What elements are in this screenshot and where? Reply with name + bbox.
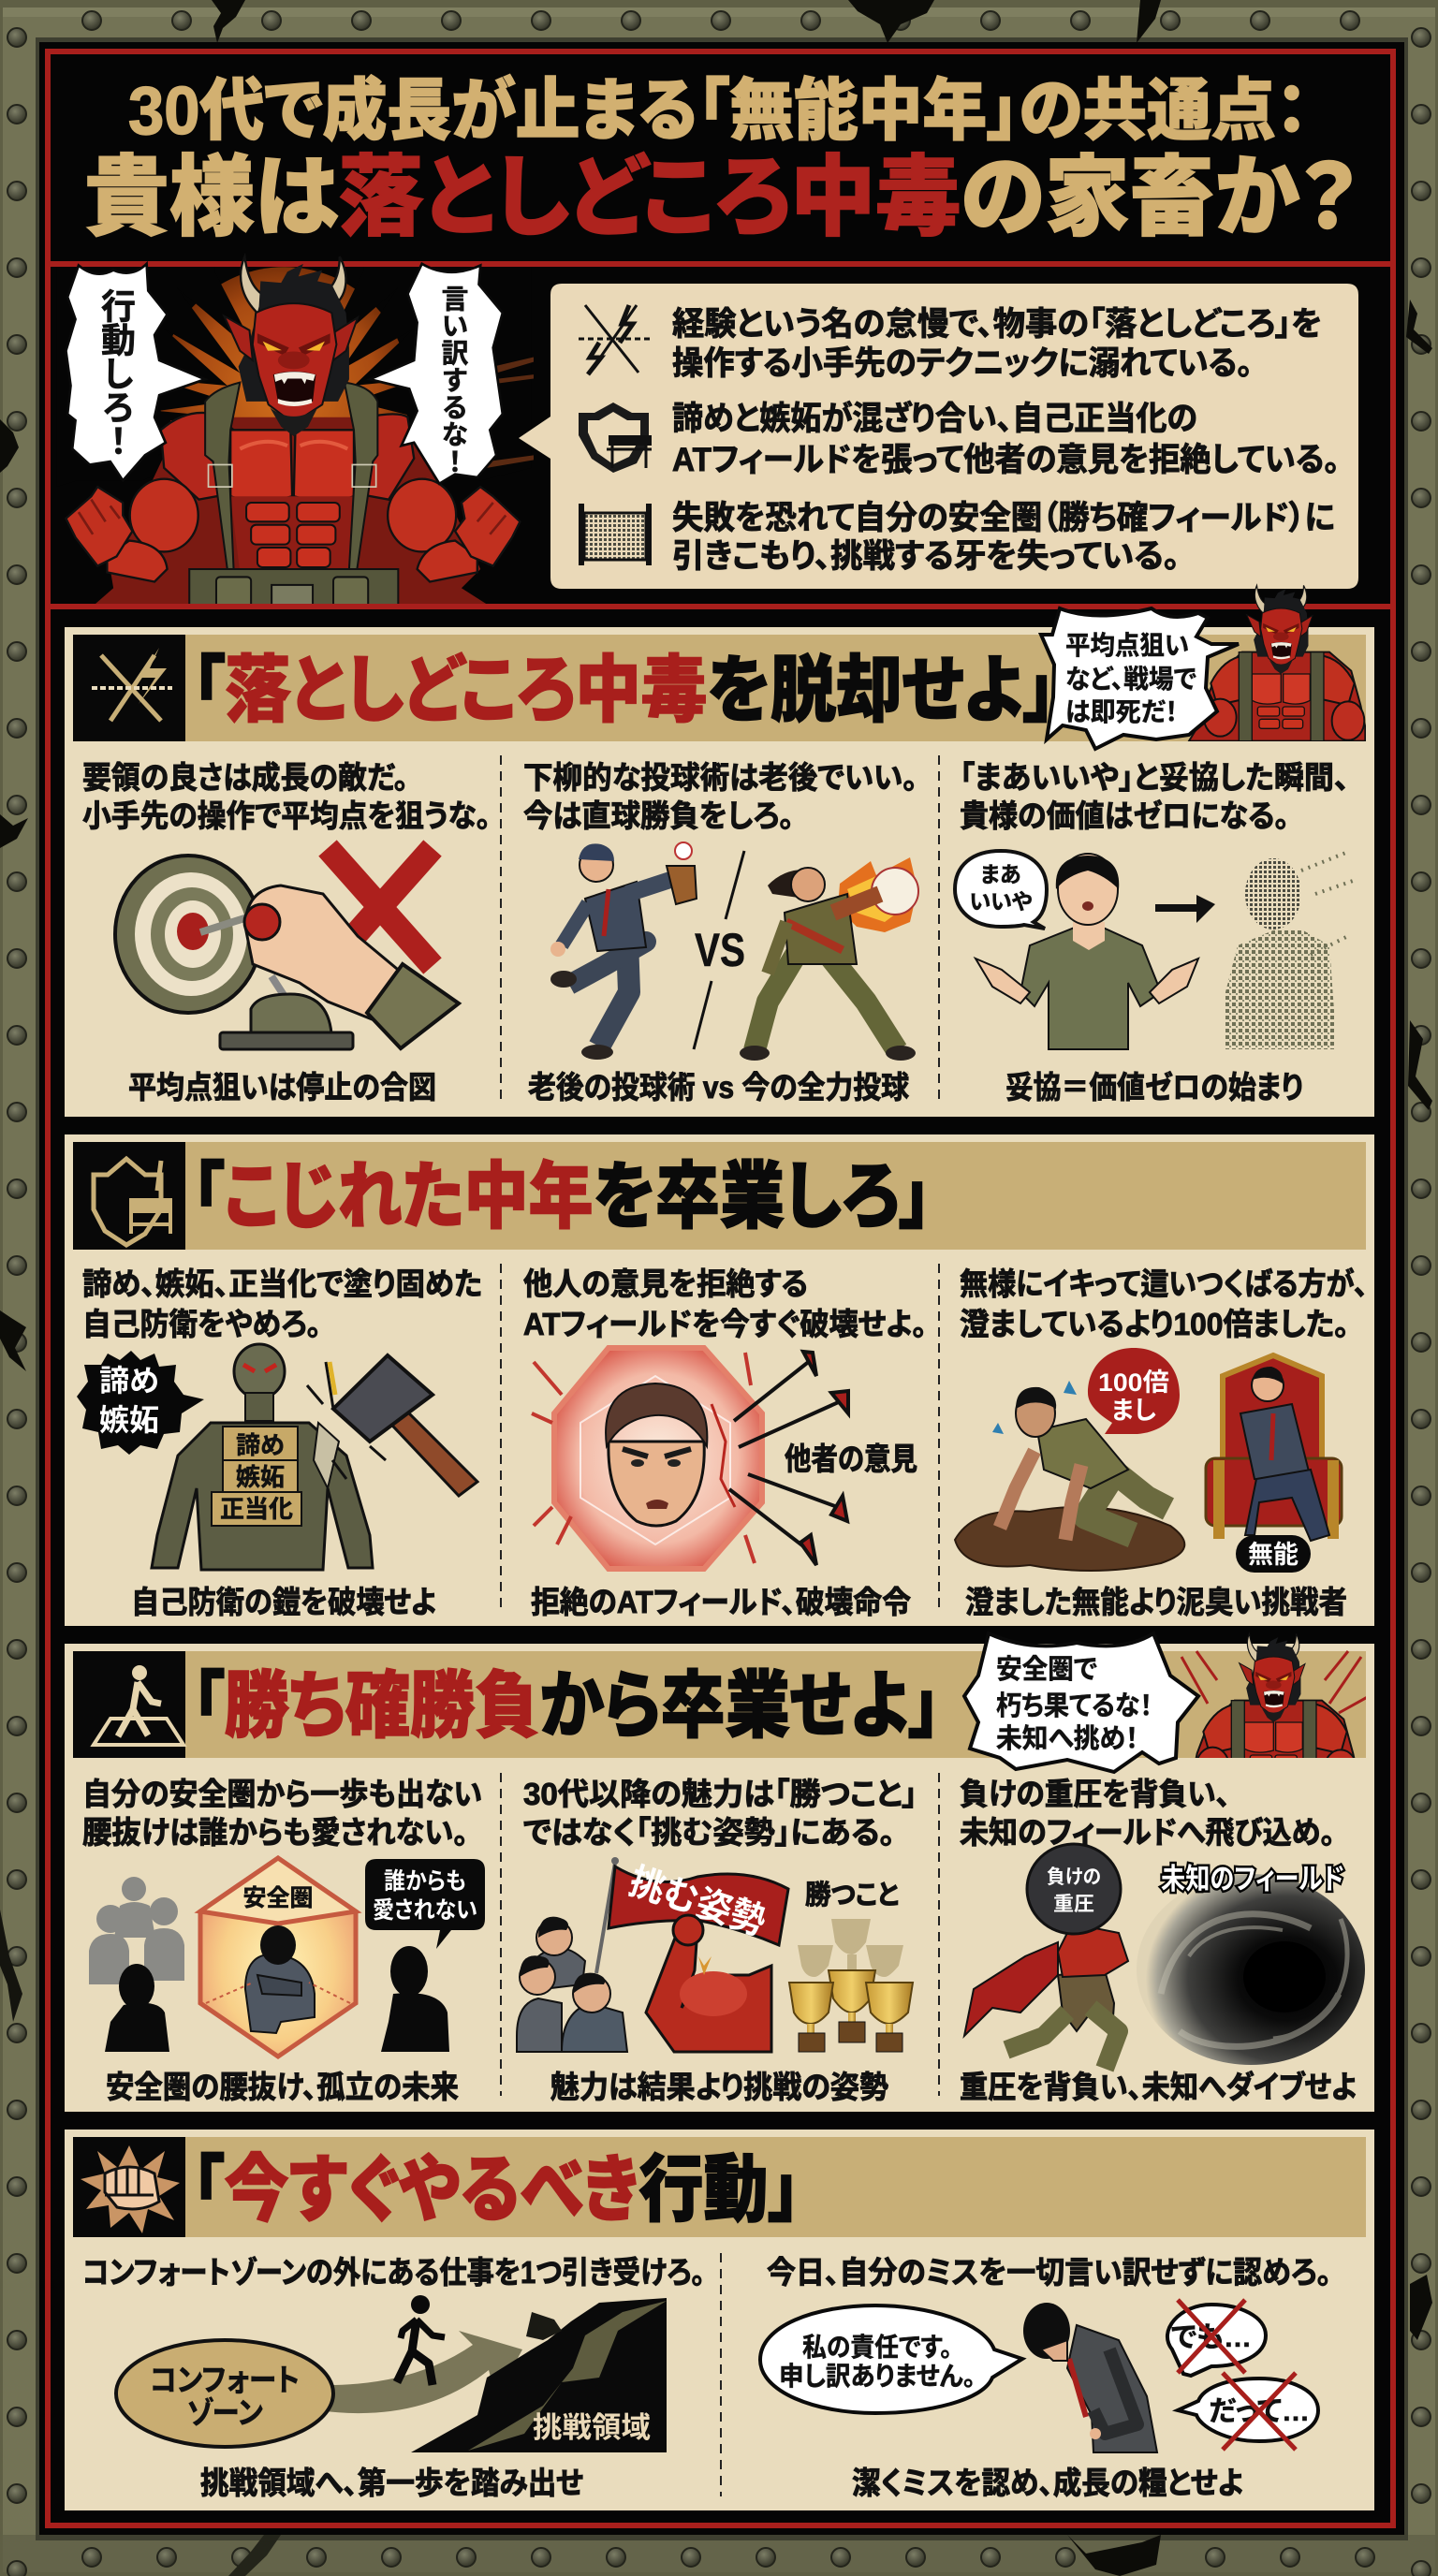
hero: red oni with speech bubbles [56, 253, 534, 612]
burst label: 諦め嫉妬: 嫉妬 [99, 1403, 159, 1437]
arrows: others' opinions [729, 1352, 848, 1565]
panel: section 2 [65, 1134, 1374, 1626]
illustration: arrow from comfort zone [318, 2331, 522, 2413]
icon: walking figure [397, 2295, 445, 2385]
illustration: AT field with face [532, 1348, 762, 1569]
speech bubble [1041, 608, 1239, 749]
illustration: watching people [517, 1917, 627, 2052]
illustration: man on throne [1206, 1355, 1342, 1541]
illustration: crawling man in mud [955, 1381, 1184, 1571]
icon: shield with barricade [73, 1142, 185, 1250]
left action text: コンフォートゾーンの外にある仕事を1つ引き受けろ。 [82, 2255, 705, 2290]
speech bubble: まあいいや: まあ [980, 862, 1021, 886]
column 2 text [523, 1777, 917, 1850]
column 3 text: 貴様の価値はゼロになる。 [960, 798, 1289, 833]
column 2 text [523, 1266, 927, 1341]
heading: 「こじれた中年を卒業しろ」 [192, 1155, 932, 1237]
speech bubble left [66, 264, 205, 480]
bubble text: 平均点狙い [1065, 631, 1189, 660]
bubble: 100倍まし: 100倍 [1098, 1368, 1169, 1397]
bubble text: 未知へ挑め！ [996, 1723, 1138, 1754]
heading: 「勝ち確勝負から卒業せよ」 [192, 1664, 941, 1747]
label: 勝つこと: 勝つこと [805, 1880, 899, 1910]
icon: fence [579, 504, 652, 565]
bubble: 100倍まし: まし [1111, 1397, 1156, 1425]
illustration: cliff [411, 2298, 667, 2452]
column 1 text: 自分の安全圏から一歩も出ない [82, 1777, 482, 1811]
text: symptom three: 失敗を恐れて自分の安全圏（勝ち確フィールド）に [672, 500, 1335, 536]
bubble: 誰からも愛されない: 愛されない [373, 1897, 477, 1924]
icon: hammer [307, 1355, 477, 1496]
column 2 text: 他人の意見を拒絶する [523, 1266, 808, 1301]
illustration: black vortex: 未知のフィールド [1161, 1863, 1344, 1895]
illustration: warrior carrying boulder: 負けの [1047, 1866, 1101, 1888]
text: symptom one: 経験という名の怠慢で、物事の「落としどころ」を [672, 306, 1322, 343]
text: symptom two: ATフィールドを張って他者の意見を拒絶している。 [672, 442, 1340, 478]
illustration: armor figure [152, 1344, 373, 1570]
illustration: cliff: 挑戦領域 [533, 2411, 651, 2444]
bubble: でも… [1167, 2300, 1266, 2376]
icon: fist burst [73, 2137, 185, 2237]
illustration: warrior carrying boulder: 重圧 [1053, 1894, 1094, 1915]
column 1 text [82, 1777, 482, 1850]
icon: cracked shield with barricade [579, 402, 652, 473]
speech bubble [964, 1633, 1198, 1772]
dashed dividers [501, 1264, 939, 1611]
illustration: black person left [105, 1964, 169, 2052]
comfort zone ellipse: ゾーン [186, 2395, 263, 2430]
oni mini portrait with red rays [1180, 1632, 1366, 1758]
column 3 text: 澄ましているより100倍ました。 [960, 1307, 1349, 1341]
caption: 自己防衛の鎧を破壊せよ [131, 1585, 436, 1619]
illustration: target, hand on lever, red X [115, 848, 459, 1049]
text: symptom three [672, 500, 1335, 575]
caption: 安全圏の腰抜け、孤立の未来 [106, 2070, 459, 2104]
column 3 text [960, 1777, 1335, 1850]
illustration: safety zone hexagon with crouching man [200, 1858, 356, 2056]
bubble text: など、戦場で [1065, 665, 1196, 694]
column 1 text [82, 1266, 482, 1341]
column 2 text: 30代以降の魅力は「勝つこと」 [523, 1777, 917, 1811]
caption: 潔くミスを認め、成長の糧とせよ [852, 2466, 1243, 2500]
illustration: safety zone hexagon with crouching man: 安全圏 [242, 1885, 314, 1911]
speech bubble: apology: 私の責任です。 [802, 2333, 952, 2362]
label pill: 無能: 無能 [1248, 1541, 1299, 1569]
illustration: black person right [381, 1946, 449, 2052]
illustration: old pitcher in suit [550, 842, 697, 1060]
illustration: warrior carrying boulder [964, 1844, 1128, 2069]
column 2 text: ATフィールドを今すぐ破壊せよ。 [523, 1307, 927, 1341]
dashed divider [720, 2253, 722, 2496]
column 3 text [960, 760, 1349, 833]
bubble: だって… [1178, 2373, 1318, 2450]
illustration: man dissolving [1225, 852, 1356, 1049]
bubble text [1065, 631, 1196, 726]
label: 他者の意見: 他者の意見 [785, 1442, 917, 1476]
column 3 text: 未知のフィールドへ飛び込め。 [960, 1815, 1335, 1850]
icon: crossed lightning box [73, 635, 185, 741]
column 1 text: 腰抜けは誰からも愛されない。 [82, 1815, 468, 1850]
illustration: grey crowd [89, 1877, 184, 1984]
caption: 妥協＝価値ゼロの始まり [1005, 1070, 1303, 1105]
oni mini portrait [1189, 585, 1365, 741]
caption: 老後の投球術 vs 今の全力投球 [528, 1070, 909, 1105]
bubble text [996, 1654, 1152, 1754]
text: symptom one [672, 306, 1322, 382]
dashed dividers [501, 1773, 939, 2096]
title: 貴様は落としどころ中毒の家畜か？ [84, 148, 1358, 246]
burst label: 諦め嫉妬: 諦め [99, 1364, 159, 1398]
speech bubble: apology: 申し訳ありません。 [779, 2362, 976, 2391]
bubble text: は即死だ！ [1065, 697, 1178, 726]
column 2 text: 下柳的な投球術は老後でいい。 [523, 760, 917, 795]
title: 30代で成長が止まる「無能中年」の共通点： [128, 74, 1308, 149]
illustration: young pitcher with fireball [740, 857, 918, 1061]
column 1 text [82, 760, 491, 833]
column 2 text: ではなく「挑む姿勢」にある。 [523, 1815, 895, 1850]
VS label with slashes [694, 851, 745, 1049]
column 1 text: 自己防衛をやめろ。 [82, 1307, 321, 1341]
caption: 挑戦領域へ、第一歩を踏み出せ [200, 2466, 583, 2500]
illustration: armor figure: 正当化 [220, 1495, 293, 1523]
illustration: banner 挑む姿勢 [596, 1857, 788, 1973]
speech bubble: まあいいや: いいや [969, 889, 1033, 914]
text: symptom two: 諦めと嫉妬が混ざり合い、自己正当化の [672, 400, 1197, 437]
caption: 澄ました無能より泥臭い挑戦者 [965, 1585, 1347, 1619]
illustration: black vortex [1137, 1863, 1365, 2065]
VS label with slashes: VS [695, 924, 745, 976]
caption: 平均点狙いは停止の合図 [128, 1070, 436, 1105]
arrow [1155, 895, 1215, 923]
panel: section 1 [65, 585, 1374, 1117]
icon: walking person box [73, 1651, 185, 1758]
column 2 text: 今は直球勝負をしろ。 [523, 798, 794, 833]
bubble text right: 言い訳するな！ [437, 285, 468, 475]
column 3 text: 負けの重圧を背負い、 [960, 1777, 1230, 1811]
column 1 text: 要領の良さは成長の敵だ。 [82, 760, 408, 795]
burst label: 諦め嫉妬 [77, 1351, 204, 1455]
column 1 text: 小手先の操作で平均点を狙うな。 [82, 798, 491, 833]
bubble: 100倍まし [1088, 1348, 1180, 1434]
text: symptom one: 操作する小手先のテクニックに溺れている。 [672, 345, 1253, 382]
bubble text: 安全圏で [996, 1654, 1097, 1685]
text: symptom three: 引きこもり、挑戦する牙を失っている。 [672, 538, 1180, 575]
heading: 「落としどころ中毒を脱却せよ」 [192, 649, 1056, 731]
illustration: banner 挑む姿勢: 挑む姿勢 [624, 1861, 770, 1943]
illustration: armor figure: 諦め [236, 1431, 285, 1459]
illustration: trophies [789, 1919, 913, 2052]
caption: 拒絶のATフィールド、破壊命令 [531, 1585, 911, 1619]
text: symptom two [672, 400, 1340, 478]
comfort zone ellipse [116, 2340, 333, 2447]
label pill: 無能 [1236, 1535, 1311, 1573]
speech bubble right [370, 264, 503, 484]
dashed dividers [501, 755, 939, 1102]
panel: section 3 [65, 1633, 1374, 2112]
caption: 重圧を背負い、未知へダイブせよ [960, 2070, 1357, 2104]
comfort zone ellipse: コンフォート [150, 2363, 300, 2397]
column 1 text: 諦め、嫉妬、正当化で塗り固めた [82, 1266, 482, 1301]
panel: section 4 [65, 2130, 1374, 2510]
speech bubble: apology [760, 2305, 1022, 2413]
caption: 魅力は結果より挑戦の姿勢 [550, 2070, 888, 2104]
bubble: 誰からも愛されない [365, 1859, 485, 1949]
bubble: だって…: だって… [1209, 2396, 1310, 2427]
right action text: 今日、自分のミスを一切言い訳せずに認めろ。 [767, 2255, 1331, 2290]
bubble text left: 行動しろ！ [95, 288, 136, 457]
heading: 「今すぐやるべき行動」 [192, 2148, 800, 2231]
bubble: 誰からも愛されない: 誰からも [384, 1868, 466, 1895]
icon: crossed lightning [579, 305, 652, 374]
illustration: muscular red arm [646, 1915, 771, 2052]
column 2 text [523, 760, 917, 833]
illustration: bowing man [1023, 2303, 1157, 2452]
panel: three symptoms [519, 284, 1358, 589]
illustration: armor figure: 嫉妬 [236, 1463, 285, 1491]
column 3 text: 「まあいいや」と妥協した瞬間、 [960, 760, 1349, 795]
illustration: man shrugging [976, 854, 1198, 1049]
bubble text: 朽ち果てるな！ [996, 1690, 1152, 1721]
title [84, 74, 1358, 246]
column 3 text: 無様にイキって這いつくばる方が、 [960, 1266, 1368, 1301]
speech bubble: まあいいや [955, 851, 1047, 929]
column 3 text [960, 1266, 1368, 1341]
bubble: でも…: でも… [1171, 2322, 1252, 2353]
